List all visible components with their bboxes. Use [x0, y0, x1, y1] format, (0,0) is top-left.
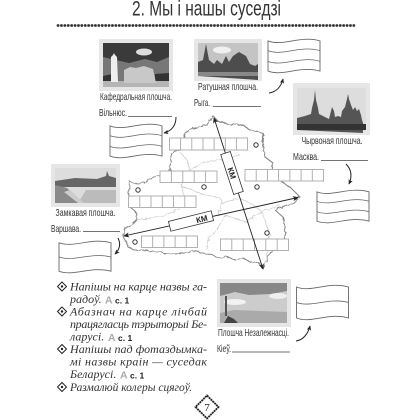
flag: Latvia	[268, 39, 320, 73]
task 2: ларусі.	[69, 330, 104, 344]
arrow: west-east distance	[124, 198, 298, 236]
task 3: Напішы пад фотаздымка-	[69, 342, 207, 356]
letter boxes: row 3	[128, 196, 196, 208]
task 4: Размалюй колеры сцягоў.	[69, 380, 192, 394]
task 3: A	[120, 370, 128, 382]
task 2: с. 1	[118, 333, 132, 343]
internal region borders	[137, 152, 280, 262]
country outline	[123, 116, 300, 269]
page number badge: 7	[204, 402, 210, 414]
answer line: Vilnius: Вільнюс.	[99, 107, 127, 119]
flag: Ukraine	[296, 285, 348, 320]
page number badge	[196, 396, 218, 418]
photo: Vilnius cathedral square	[99, 39, 173, 91]
answer line: Warsaw: Варшава.	[51, 223, 81, 235]
photo: Kyiv Independence Square	[217, 279, 291, 327]
curved arrow to Russia flag	[346, 164, 351, 184]
flag: Poland	[59, 241, 111, 273]
letter boxes: row 6	[220, 239, 288, 250]
answer line: Moscow: Масква.	[293, 151, 319, 163]
caption: Warsaw: Замкавая плошча.	[56, 207, 116, 219]
letter boxes: row 1	[170, 138, 248, 150]
task 2: працягласць тэрыторыі Бе-	[70, 317, 207, 331]
curved arrow to Poland flag	[115, 238, 120, 254]
task 1: A	[105, 294, 113, 306]
flag: Russia	[317, 190, 369, 223]
answer line: Riga	[194, 97, 261, 109]
caption: Riga: Ратушная плошча.	[198, 81, 258, 93]
arrow: north-south distance	[214, 118, 263, 269]
task 3: мі назвы краін — суседак	[69, 354, 207, 368]
task 3	[58, 342, 207, 382]
city markers	[133, 143, 269, 244]
curved arrow to Lithuania flag	[164, 117, 176, 133]
caption: Moscow: Чырвоная плошча.	[302, 135, 362, 147]
distance label: vertical KM: КМ	[225, 166, 238, 180]
task list	[58, 280, 207, 394]
task 2: Абазнач на карце лічбай	[69, 304, 207, 318]
photo: Moscow Red Square	[293, 83, 370, 135]
letter boxes: row 5	[142, 236, 198, 248]
photo: Warsaw castle square	[51, 164, 120, 207]
map of Belarus	[123, 116, 324, 269]
task 3: Беларусі.	[69, 367, 116, 381]
answer line: Kyiv: Кіеў.	[217, 343, 231, 355]
distance label: horizontal KM	[168, 211, 214, 232]
dotted title rule	[58, 24, 357, 27]
task 1: Напішы на карце назвы га-	[69, 280, 207, 294]
answer line: Vilnius	[99, 107, 172, 119]
task 2	[58, 304, 207, 344]
distance label: horizontal KM: КМ	[195, 213, 209, 225]
task 1	[58, 280, 207, 306]
curved arrow to Latvia flag	[269, 79, 283, 93]
letter boxes: row 2	[160, 171, 217, 182]
answer line: Riga: Рыга.	[194, 97, 210, 109]
distance label: vertical KM	[221, 151, 243, 195]
task 3: с. 1	[130, 370, 144, 380]
curved arrow to Ukraine flag	[296, 326, 310, 341]
caption: Kyiv: Плошча Незалежнасці.	[218, 327, 289, 339]
task 1: радоў.	[69, 292, 102, 306]
caption: Vilnius: Кафедральная плошча.	[100, 91, 172, 103]
photo: Riga town hall square	[194, 39, 262, 81]
flag: Lithuania	[110, 124, 162, 158]
letter boxes: row 4	[245, 170, 324, 181]
answer line: Warsaw	[51, 223, 120, 235]
task 2: A	[108, 332, 116, 344]
answer line: Moscow	[293, 151, 368, 163]
answer line: Kyiv	[217, 343, 290, 355]
task 1: с. 1	[115, 296, 129, 306]
